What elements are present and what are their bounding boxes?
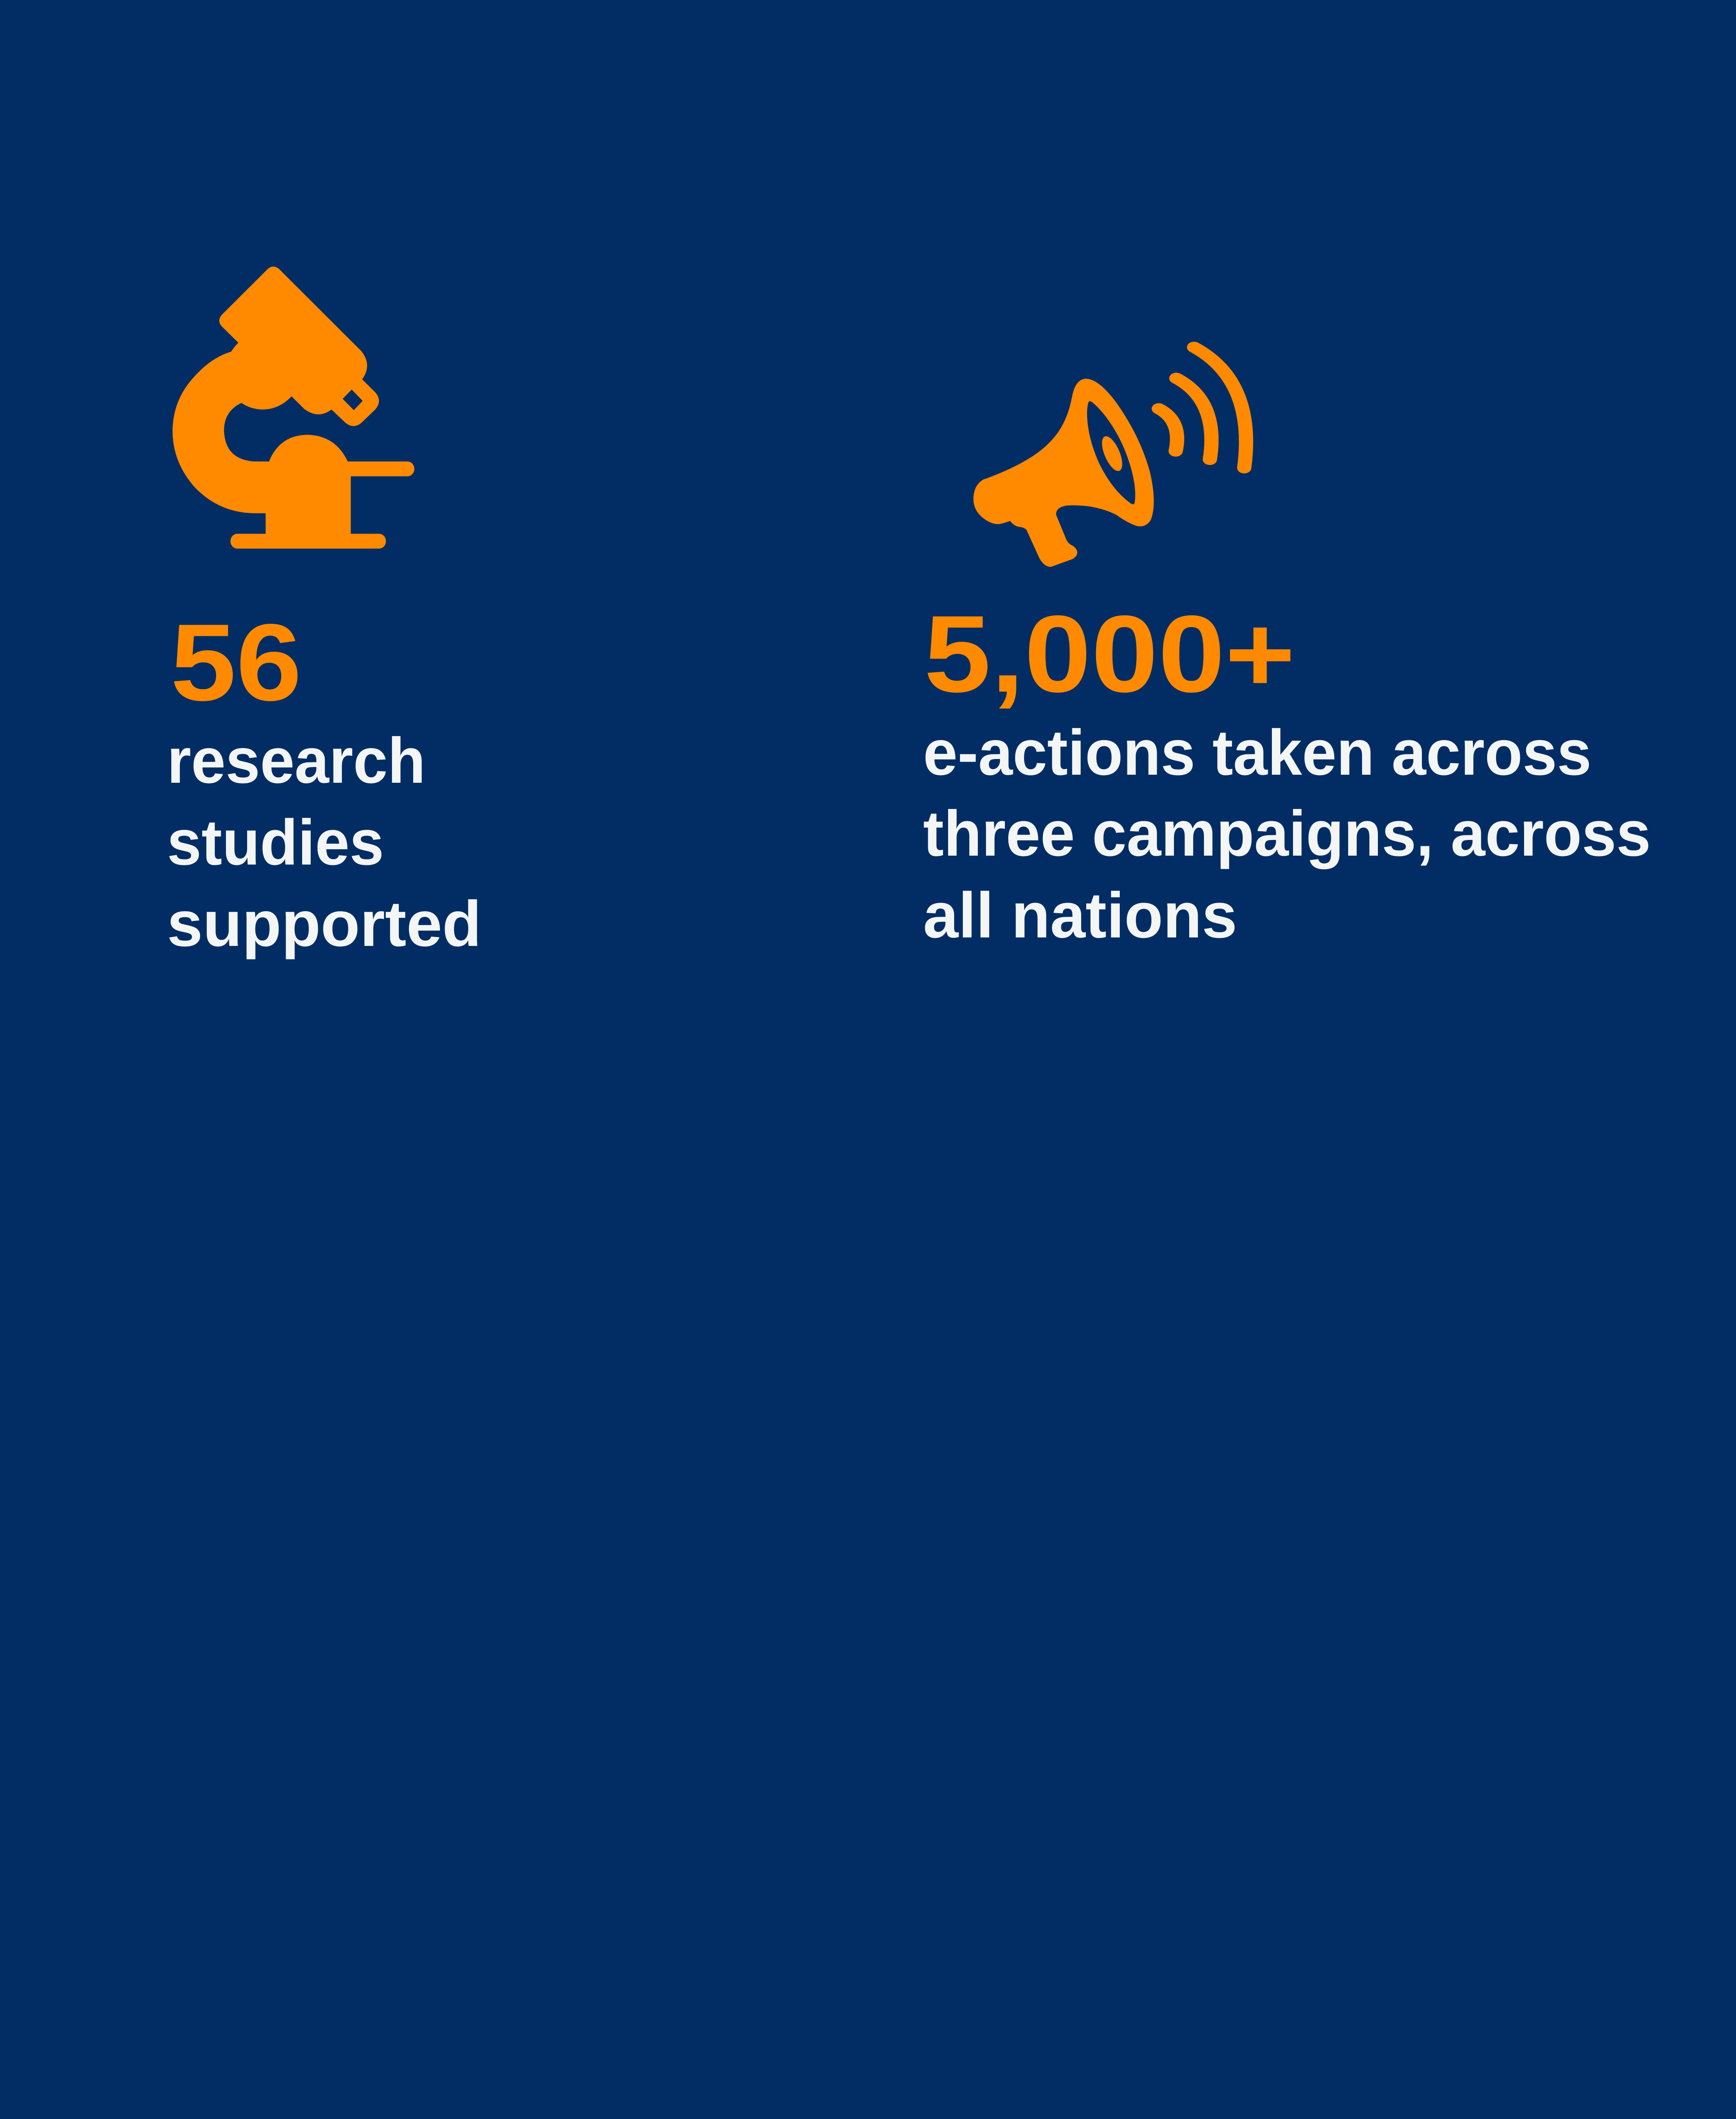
text block: e-actions taken across three campaigns, across all nations: e-actions taken across — [923, 717, 1591, 789]
text block: e-actions taken across three campaigns, across all nations: all nations — [923, 879, 1237, 951]
number: 5,000+: 5,000+ — [924, 592, 1295, 715]
panel: e-actions statistic — [923, 347, 1651, 951]
icon: megaphone — [974, 347, 1246, 567]
text block: research studies supported: studies — [167, 806, 384, 879]
text block: e-actions taken across three campaigns, across all nations: three campaigns, across — [923, 798, 1651, 870]
number: 56: 56 — [170, 601, 302, 723]
panel: research studies statistic — [167, 267, 481, 960]
text block: e-actions taken across three campaigns, across all nations — [923, 717, 1651, 951]
text block: research studies supported: research — [167, 725, 426, 797]
icon: microscope — [172, 267, 415, 548]
text block: research studies supported: supported — [167, 888, 481, 960]
text block: research studies supported — [167, 725, 481, 960]
